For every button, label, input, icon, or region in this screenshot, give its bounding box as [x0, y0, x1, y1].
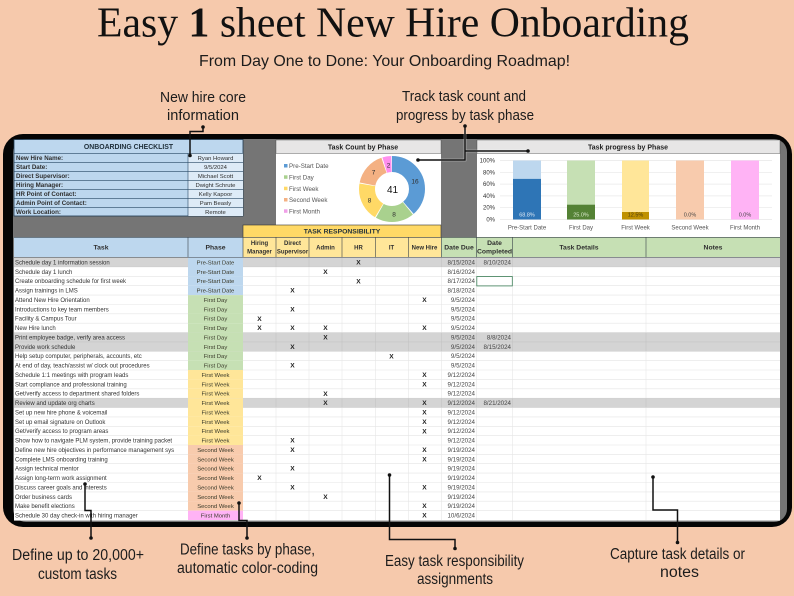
- row 5: Attend New Hire Orientation: [15, 298, 90, 304]
- row 20: [15, 436, 476, 445]
- donut legend: Pre-Start Date: [289, 163, 329, 170]
- table header row: IT: [389, 245, 394, 251]
- row 19: X: [422, 428, 427, 435]
- table header row: Task Details: [559, 244, 599, 252]
- row 8: First Day: [204, 326, 227, 332]
- row 11: First Day: [204, 354, 227, 360]
- checklist labels: Start Date:: [16, 164, 47, 171]
- row 6: Introductions to key team members: [15, 307, 109, 313]
- panel: task count by phase: [276, 140, 441, 225]
- bar chart y axis: 80%: [483, 170, 496, 176]
- checklist values: Kelly Kapoor: [199, 192, 232, 198]
- donut chart: 8: [368, 198, 372, 204]
- row 25: [15, 482, 476, 492]
- row 18: Set up email signature on Outlook: [15, 420, 106, 426]
- callout: new hire core information: [160, 90, 246, 124]
- row 4: 8/18/2024: [447, 288, 476, 295]
- donut legend: First Week: [289, 186, 319, 193]
- row 8: New Hire lunch: [15, 326, 56, 332]
- row 25: Second Week: [197, 485, 234, 491]
- row 7: Facility & Campus Tour: [15, 317, 77, 323]
- row 11: Help setup computer, peripherals, accounts, etc: [15, 354, 142, 360]
- callout: custom tasks: Define up to 20,000+: [12, 547, 144, 564]
- checklist labels: [16, 155, 87, 216]
- row 5: X: [422, 297, 427, 304]
- row 11: X: [389, 353, 394, 360]
- row 16: First Week: [201, 401, 230, 407]
- row 19: First Week: [201, 429, 230, 435]
- row 1: [14, 258, 780, 267]
- row 3: [15, 276, 512, 286]
- row 26: X: [323, 494, 328, 501]
- row 12: 9/5/2024: [451, 363, 476, 370]
- row 11: 9/5/2024: [451, 353, 476, 360]
- row 15: First Week: [201, 392, 230, 398]
- row 25: X: [290, 484, 295, 492]
- row 5: First Day: [204, 298, 227, 304]
- row 4: X: [290, 288, 295, 295]
- row 1: 8/15/2024: [447, 260, 476, 267]
- arrow: task responsibility: [388, 473, 457, 550]
- row 26: Order business cards: [15, 495, 72, 501]
- row 8: X: [290, 325, 295, 332]
- row 19: Get/verify access to program areas: [15, 429, 108, 435]
- row 10: X: [290, 344, 295, 351]
- row 24: Assign long-term work assignment: [15, 476, 107, 482]
- checklist values: Pam Beasly: [200, 201, 231, 207]
- row 3: X: [356, 278, 361, 285]
- row 27: Make benefit elections: [15, 504, 75, 510]
- bar: first month: First Month: [730, 226, 760, 232]
- bar chart y axis: 100%: [480, 158, 496, 164]
- row 28: Schedule 30 day check-in with hiring manager: [15, 514, 138, 520]
- row 8: X: [323, 325, 328, 332]
- row 15: [15, 389, 476, 398]
- row 9: 8/8/2024: [487, 335, 512, 342]
- row 21: Define new hire objectives in performance management sys: [15, 448, 174, 454]
- callout: track task count and progress: Track task count and: [402, 89, 526, 105]
- donut chart: 41: [387, 185, 398, 196]
- row 19: 9/12/2024: [447, 428, 476, 435]
- bar: first week: [621, 160, 651, 232]
- row 6: X: [290, 306, 295, 314]
- row 13: [15, 370, 476, 379]
- donut legend: [284, 163, 329, 216]
- table header row: Completed: [477, 249, 512, 256]
- row 3: Pre-Start Date: [197, 279, 235, 285]
- row 16: X: [422, 400, 427, 407]
- table header row: Notes: [704, 244, 723, 252]
- row 2: Pre-Start Date: [197, 270, 235, 276]
- row 8: [15, 323, 476, 333]
- row 23: Second Week: [197, 467, 234, 473]
- row 8: X: [257, 325, 262, 332]
- row 8: 9/5/2024: [451, 325, 476, 332]
- callout: custom tasks: custom tasks: [38, 566, 117, 583]
- panel: onboarding checklist: [14, 140, 243, 216]
- row 18: 9/12/2024: [447, 419, 476, 426]
- row 4: [15, 286, 476, 295]
- heading: task progress: Task progress by Phase: [588, 144, 668, 152]
- panel: task progress by phase: [477, 140, 780, 237]
- callout: tasks by phase: automatic color-coding: [177, 560, 318, 577]
- row 21: X: [422, 447, 427, 454]
- row 24: [15, 473, 476, 482]
- task table body: [14, 258, 780, 521]
- row 15: 9/12/2024: [447, 391, 476, 398]
- row 27: 9/19/2024: [447, 503, 476, 510]
- row 9: Print employee badge, verify area access: [15, 336, 125, 342]
- row 4: Pre-Start Date: [197, 289, 235, 295]
- table header row: Task: [94, 244, 109, 252]
- task responsibility band: [243, 225, 441, 237]
- bar chart y axis: 40%: [483, 194, 496, 200]
- row 27: X: [422, 503, 427, 510]
- donut chart: 16: [411, 178, 419, 186]
- row 22: [15, 454, 476, 464]
- table header row: Supervisor: [277, 250, 309, 256]
- row 15: X: [323, 391, 328, 398]
- row 21: X: [290, 447, 295, 454]
- row 13: Schedule 1:1 meetings with program leads: [15, 373, 128, 379]
- donut chart: 7: [372, 170, 376, 176]
- bar chart y axis: 0%: [486, 218, 496, 224]
- row 28: X: [422, 513, 427, 520]
- row 21: 9/19/2024: [447, 447, 476, 454]
- row 20: First Week: [201, 439, 230, 445]
- bar: second week: 0.0%: [684, 212, 696, 218]
- checklist values: Ryan Howard: [198, 156, 233, 162]
- checklist labels: HR Point of Contact:: [16, 191, 76, 198]
- donut chart: 2: [387, 162, 391, 170]
- donut legend: First Month: [289, 208, 321, 216]
- bar chart y axis: 20%: [483, 206, 496, 212]
- callout: custom tasks: [12, 547, 144, 583]
- checklist labels: Hiring Manager:: [16, 182, 63, 189]
- row 9: X: [323, 335, 328, 342]
- row 25: 9/19/2024: [447, 484, 476, 491]
- row 10: Provide work schedule: [15, 345, 76, 351]
- row 28: First Month: [201, 514, 230, 520]
- callout: new hire core information: information: [167, 108, 239, 124]
- callout: capture details: [610, 546, 745, 581]
- row 28: [15, 511, 476, 520]
- row 14: [15, 379, 476, 389]
- row 25: X: [422, 484, 427, 492]
- donut legend: Second Week: [289, 197, 328, 204]
- title: Easy 1 sheet New Hire Onboarding: [97, 0, 689, 46]
- spreadsheet frame: [3, 134, 792, 527]
- checklist labels: Admin Point of Contact:: [16, 200, 87, 207]
- row 19: [15, 426, 476, 436]
- row 26: Second Week: [197, 495, 234, 501]
- table header row: [14, 237, 780, 257]
- row 9: 9/5/2024: [451, 335, 476, 342]
- row 28: 10/6/2024: [447, 513, 476, 520]
- table header row: Manager: [247, 250, 272, 256]
- row 4: Assign trainings in LMS: [15, 289, 78, 295]
- table header row: Hiring: [251, 241, 268, 247]
- row 1: Schedule day 1 information session: [15, 261, 110, 267]
- bar: first day: First Day: [569, 226, 593, 232]
- row 6: [15, 304, 476, 314]
- row 13: First Week: [201, 373, 230, 379]
- row 7: First Day: [204, 317, 227, 323]
- row 23: Assign technical mentor: [15, 467, 79, 473]
- row 14: First Week: [201, 382, 230, 388]
- row 23: 9/19/2024: [447, 466, 476, 473]
- donut legend: First Day: [289, 174, 315, 182]
- row 10: First Day: [204, 345, 227, 351]
- bar: first day: [567, 160, 595, 232]
- bar: first month: [730, 160, 760, 232]
- checklist values: Dwight Schrute: [196, 183, 236, 189]
- row 26: [15, 492, 476, 501]
- checklist values: Michael Scott: [198, 174, 234, 180]
- row 10: [14, 342, 780, 351]
- arrow: custom tasks: [83, 482, 93, 540]
- row 20: Show how to navigate PLM system, provide training packet: [15, 439, 172, 445]
- checklist labels: New Hire Name:: [16, 155, 63, 162]
- row 26: 9/19/2024: [447, 494, 476, 501]
- row 1: 8/10/2024: [483, 260, 512, 267]
- row 14: Start compliance and professional training: [15, 382, 127, 388]
- bar: first month: 0.0%: [739, 212, 751, 218]
- row 6: First Day: [204, 307, 227, 313]
- row 18: [15, 417, 476, 426]
- row 12: X: [290, 363, 295, 370]
- bar: pre-start date: Pre-Start Date: [508, 226, 547, 232]
- row 2: Schedule day 1 lunch: [15, 270, 72, 276]
- row 23: X: [290, 466, 295, 473]
- callout: tasks by phase: Define tasks by phase,: [180, 542, 315, 558]
- row 16: [14, 398, 780, 408]
- row 16: 8/21/2024: [483, 400, 512, 407]
- row 8: X: [422, 325, 427, 332]
- row 2: 8/16/2024: [447, 269, 476, 276]
- row 14: 9/12/2024: [447, 381, 476, 388]
- row 10: 9/5/2024: [451, 344, 476, 351]
- row 17: 9/12/2024: [447, 409, 476, 416]
- bar: first day: 25.0%: [573, 212, 589, 218]
- row 1: Pre-Start Date: [197, 261, 235, 267]
- checklist labels: Work Location:: [16, 209, 61, 216]
- row 14: X: [422, 381, 427, 388]
- bar chart y axis: 60%: [483, 182, 496, 188]
- row 25: Discuss career goals and interests: [15, 485, 107, 491]
- row 17: [15, 408, 476, 417]
- row 7: [15, 314, 476, 323]
- checklist values: 9/5/2024: [204, 165, 228, 171]
- row 17: First Week: [201, 410, 230, 416]
- bar: pre-start date: 68.8%: [519, 212, 535, 218]
- row 1: X: [356, 260, 361, 267]
- row 22: 9/19/2024: [447, 456, 476, 463]
- row 9: First Day: [204, 336, 227, 342]
- callout: easy responsibility: [385, 553, 524, 588]
- row 24: X: [257, 475, 262, 482]
- task responsibility band: TASK RESPONSIBILITY: [304, 229, 381, 236]
- bar: second week: [671, 160, 710, 232]
- row 3: Create onboarding schedule for first week: [15, 279, 127, 285]
- row 12: First Day: [204, 364, 227, 370]
- donut chart: 8: [392, 212, 396, 218]
- row 24: Second Week: [197, 476, 234, 482]
- bar: pre-start date: [508, 160, 547, 232]
- bar: second week: Second Week: [671, 226, 710, 232]
- row 21: Second Week: [197, 448, 234, 454]
- row 3: 8/17/2024: [447, 278, 476, 285]
- arrow: new hire core information: [188, 125, 205, 157]
- row 18: X: [422, 419, 427, 426]
- callout: tasks by phase: [177, 542, 318, 577]
- bar chart y axis: [480, 158, 496, 224]
- callout: capture details: Capture task details or: [610, 546, 745, 563]
- table header row: Phase: [205, 244, 226, 252]
- row 2: [15, 267, 476, 276]
- subtitle: From Day One to Done: Your Onboarding Roadmap!: [199, 53, 570, 70]
- row 12: At end of day, teach/assist w/ clock out procedures: [15, 364, 150, 370]
- row 16: X: [323, 400, 328, 407]
- row 11: [15, 351, 476, 361]
- row 20: 9/12/2024: [447, 438, 476, 445]
- row 5: 9/5/2024: [451, 297, 476, 304]
- row 24: 9/19/2024: [447, 475, 476, 482]
- checklist labels: Direct Supervisor:: [16, 173, 70, 180]
- row 15: Get/verify access to department shared folders: [15, 392, 139, 398]
- row 2: X: [323, 269, 328, 276]
- row 7: X: [257, 316, 262, 323]
- row 16: Review and update org charts: [15, 401, 95, 407]
- callout: capture details: notes: [660, 564, 699, 581]
- table header row: New Hire: [412, 245, 438, 251]
- arrow: task details or notes: [651, 475, 679, 544]
- callout: easy responsibility: Easy task responsibility: [385, 553, 524, 570]
- row 23: [15, 464, 476, 473]
- row 21: [15, 445, 476, 454]
- table header row: HR: [354, 245, 363, 251]
- bar: first week: First Week: [621, 226, 651, 232]
- row 22: Second Week: [197, 457, 234, 463]
- row 22: X: [422, 456, 427, 463]
- row 12: [15, 361, 476, 370]
- callout: easy responsibility: assignments: [417, 571, 493, 588]
- checklist values: [196, 156, 236, 216]
- row 10: 8/15/2024: [483, 344, 512, 351]
- heading: task count: Task Count by Phase: [328, 144, 398, 152]
- donut chart: [367, 162, 419, 218]
- row 7: 9/5/2024: [451, 316, 476, 323]
- arrow: track task count and progress: [416, 124, 530, 162]
- row 20: X: [290, 438, 295, 445]
- row 5: [15, 295, 476, 304]
- callout: new hire core information: New hire core: [160, 90, 246, 106]
- row 6: 9/5/2024: [451, 306, 476, 313]
- checklist values: Remote: [205, 210, 227, 216]
- table header row: Admin: [316, 245, 335, 251]
- row 27: [15, 501, 476, 511]
- row 22: Complete LMS onboarding training: [15, 457, 108, 463]
- row 13: 9/12/2024: [447, 372, 476, 379]
- row 18: First Week: [201, 420, 230, 426]
- row 17: X: [422, 410, 427, 416]
- bar: first week: 12.5%: [628, 212, 643, 218]
- callout: track task count and progress: progress by task phase: [396, 108, 534, 124]
- row 9: [14, 333, 780, 342]
- row 17: Set up new hire phone & voicemail: [15, 410, 107, 416]
- table header row: Date Due: [444, 244, 474, 252]
- row 27: Second Week: [197, 504, 234, 510]
- callout: track task count and progress: [396, 89, 534, 124]
- row 13: X: [422, 372, 427, 379]
- table header row: Date: [487, 240, 502, 247]
- arrow: phase color-coding: [237, 501, 249, 540]
- checklist heading: ONBOARDING CHECKLIST: [84, 144, 174, 151]
- row 16: 9/12/2024: [447, 400, 476, 407]
- table header row: Direct: [284, 241, 301, 247]
